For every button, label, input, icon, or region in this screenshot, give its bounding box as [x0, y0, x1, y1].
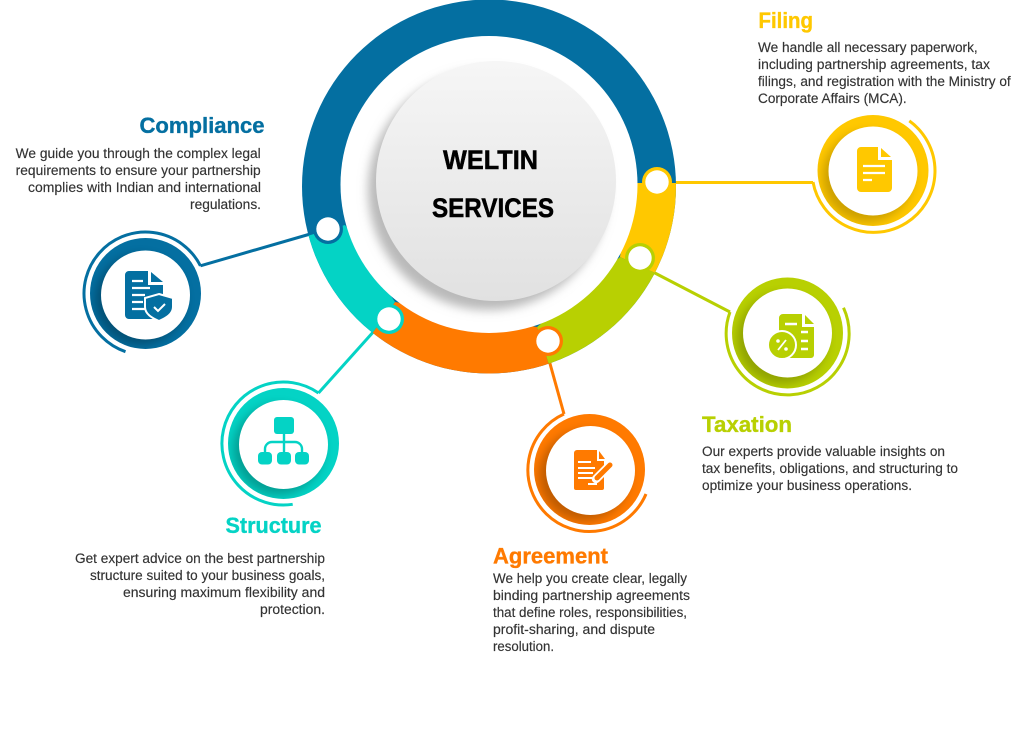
node: taxation: [625, 243, 655, 273]
text: taxation description: tax benefits, obligations, and structuring to: [702, 461, 958, 476]
text: compliance description: regulations.: [190, 197, 261, 212]
text: compliance description: complies with Indian and international: [28, 180, 261, 195]
central ring diagram: [302, 0, 676, 374]
text: filing description: [758, 40, 1011, 106]
node: structure: [374, 304, 404, 334]
icon: document: [857, 147, 892, 192]
text: agreement description: profit-sharing, and dispute: [493, 622, 655, 637]
text: agreement description: [493, 571, 690, 654]
text: agreement description: binding partnership agreements: [493, 588, 690, 603]
node: compliance: [313, 214, 343, 244]
icon: document with shield: [125, 271, 173, 321]
badge: compliance: [84, 232, 201, 352]
text: structure description: protection.: [260, 602, 325, 617]
text: filing description: We handle all necessary paperwork,: [758, 40, 978, 55]
text: structure description: Get expert advice on the best partnership: [75, 551, 325, 566]
node: agreement: [533, 326, 563, 356]
badge: filing: [813, 115, 935, 232]
text: compliance description: We guide you through the complex legal: [16, 146, 261, 161]
node: filing: [642, 167, 672, 197]
connector: agreement: [549, 360, 564, 414]
icon: org chart: [258, 417, 309, 464]
text: taxation description: optimize your business operations.: [702, 478, 912, 493]
badge: taxation: [726, 278, 849, 395]
hub title: SERVICES: [432, 193, 554, 223]
heading: Compliance: Compliance: [140, 113, 264, 138]
connector: structure: [318, 330, 375, 393]
text: compliance description: requirements to ensure your partnership: [16, 163, 261, 178]
heading: Structure: Structure: [226, 513, 322, 538]
heading: Filing: Filing: [758, 8, 813, 33]
text: agreement description: resolution.: [493, 639, 554, 654]
heading: Taxation: Taxation: [702, 412, 792, 437]
hub title: WELTIN: [443, 145, 538, 175]
text: agreement description: that define roles, responsibilities,: [493, 605, 687, 620]
text: structure description: structure suited to your business goals,: [90, 568, 325, 583]
ring segments: [302, 0, 676, 374]
hub shadow: [368, 70, 608, 310]
text: filing description: Corporate Affairs (MCA).: [758, 91, 907, 106]
text: taxation description: [702, 444, 958, 493]
text: filing description: filings, and registration with the Ministry of: [758, 74, 1011, 89]
text: compliance description: [16, 146, 261, 212]
text: structure description: [75, 551, 325, 617]
badge: agreement: [528, 414, 646, 532]
connector: taxation: [651, 271, 730, 312]
connector: compliance: [200, 234, 312, 266]
hub title: [432, 145, 554, 223]
inner white disc: [340, 36, 638, 333]
connector: filing: [674, 181, 813, 184]
heading: Agreement: Agreement: [493, 544, 609, 568]
text: agreement description: We help you create clear, legally: [493, 571, 687, 586]
text: filing description: including partnership agreements, tax: [758, 57, 990, 72]
text: taxation description: Our experts provide valuable insights on: [702, 444, 945, 459]
hub disc: [376, 61, 616, 301]
text: structure description: ensuring maximum flexibility and: [123, 585, 325, 600]
badge: structure: [222, 382, 339, 505]
icon: tax document: [768, 314, 814, 359]
icon: document with pen: [574, 450, 610, 490]
